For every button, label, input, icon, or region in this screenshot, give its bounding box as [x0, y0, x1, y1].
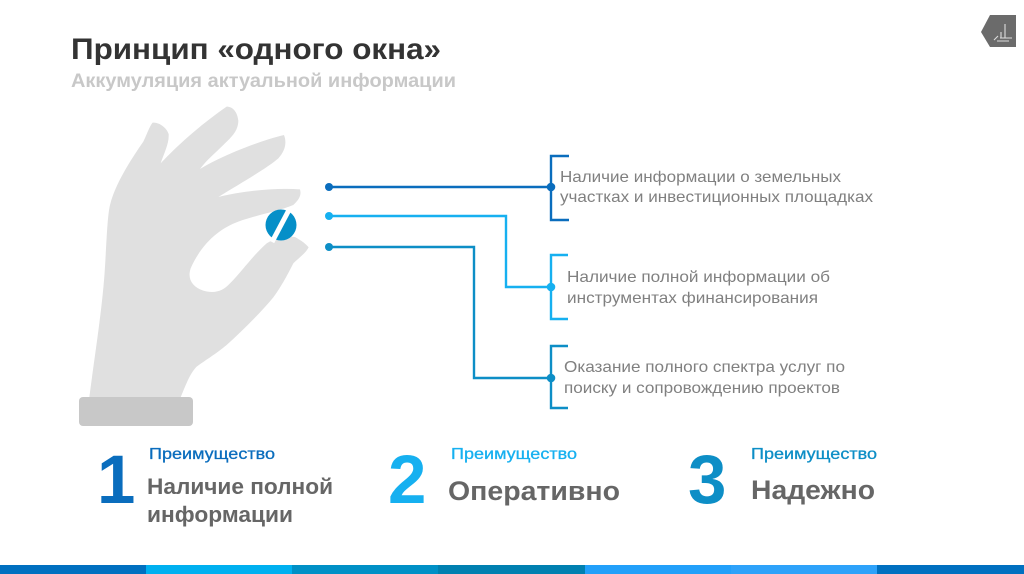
- cuff: [79, 397, 193, 426]
- advantage 2: Преимущество: [451, 446, 577, 463]
- title: Принцип «одного окна»: [71, 33, 441, 66]
- hand illustration: [79, 107, 309, 426]
- connector 1: [325, 156, 569, 220]
- advantage 3: Преимущество: [751, 446, 877, 463]
- text block 1: участках и инвестиционных площадках: [560, 189, 873, 206]
- advantage 1: Преимущество: [149, 446, 275, 463]
- advantage 1: Наличие полной: [147, 474, 333, 499]
- text block 1: Наличие информации о земельных: [560, 169, 841, 186]
- advantage 1: 1: [97, 441, 135, 518]
- pill icon: [266, 208, 296, 242]
- text block 3: [564, 359, 845, 397]
- advantage 2: 2: [388, 441, 426, 518]
- advantage 1: информации: [147, 502, 293, 527]
- connector 2: [325, 212, 568, 319]
- text block 1: [560, 169, 873, 206]
- text block 2: инструментах финансирования: [567, 290, 818, 307]
- text block 2: [567, 269, 830, 307]
- text block 3: поиску и сопровождению проектов: [564, 380, 840, 397]
- advantage 2: [388, 441, 620, 518]
- connector 3: [325, 243, 568, 408]
- subtitle: Аккумуляция актуальной информации: [71, 71, 456, 92]
- advantage 2: Оперативно: [448, 476, 620, 506]
- advantage 3: [688, 441, 877, 518]
- advantage 1: [97, 441, 333, 527]
- text block 3: Оказание полного спектра услуг по: [564, 359, 845, 376]
- hand silhouette: [89, 107, 309, 397]
- advantage 3: 3: [688, 441, 726, 518]
- advantage 3: Надежно: [751, 475, 875, 505]
- text block 2: Наличие полной информации об: [567, 269, 830, 286]
- footer color bar: [0, 565, 1024, 574]
- logo badge: [981, 15, 1016, 47]
